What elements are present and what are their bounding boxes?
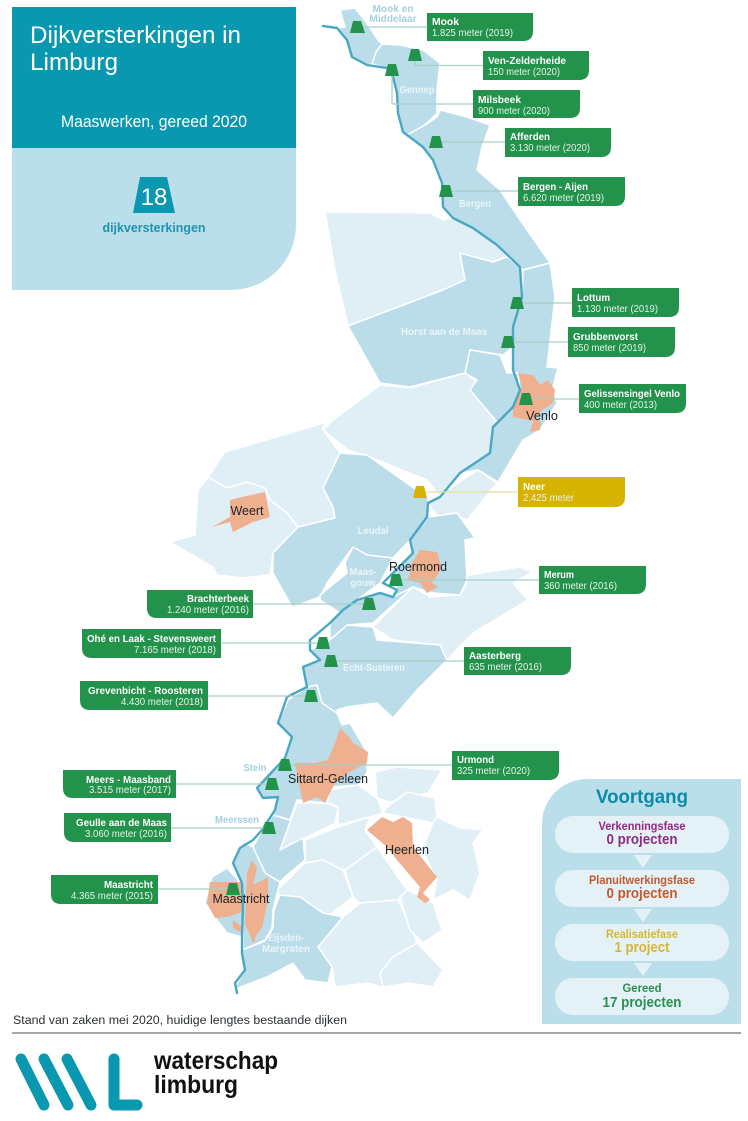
region names: Margraten: [262, 943, 310, 955]
city names: Heerlen: [385, 842, 429, 857]
city: Weert: [212, 492, 270, 532]
title: Dijkversterkingen in: [30, 22, 241, 49]
marker: Neer: [413, 486, 427, 498]
label: Milsbeek: [473, 90, 580, 118]
stage: Gereed: Gereed: [622, 981, 662, 995]
label: Geulle aan de Maas: [64, 813, 171, 842]
label: Ven-Zelderheide: 150 meter (2020): [488, 67, 560, 78]
marker: Grubbenvorst: [501, 336, 515, 348]
icon: dike count trapezoid: [133, 177, 175, 213]
label: Grubbenvorst: Grubbenvorst: [573, 331, 638, 343]
stage: Verkenningsfase: 0 projecten: [606, 832, 678, 848]
region names: Bergen: [459, 198, 491, 210]
label: Meers - Maasband: 3.515 meter (2017): [89, 785, 171, 796]
region names: Mook en: [372, 3, 414, 15]
city: Heerlen: [367, 817, 437, 903]
stage: Planuitwerkingsfase: [555, 870, 729, 907]
label: Milsbeek: Milsbeek: [478, 94, 521, 106]
project labels: [51, 13, 686, 904]
region names: Stein: [244, 762, 266, 774]
marker: Milsbeek: [385, 64, 399, 76]
label: Lottum: Lottum: [577, 292, 610, 304]
label: Bergen - Aijen: [518, 177, 625, 206]
icon: logo mark: [21, 1059, 137, 1105]
marker: Ohé en Laak - Stevensweert: [316, 637, 330, 649]
arrow: [634, 909, 652, 922]
label: Brachterbeek: 1.240 meter (2016): [167, 605, 249, 616]
city: Maastricht south: [233, 920, 242, 933]
marker: Urmond: [278, 759, 292, 771]
light regions: [170, 212, 532, 987]
label: Gelissensingel Venlo: Gelissensingel Venlo: [584, 388, 680, 400]
city names: Sittard-Geleen: [288, 771, 368, 786]
label: Meers - Maasband: [63, 770, 176, 798]
city names: [212, 408, 558, 906]
city: Sittard-Geleen: [295, 728, 368, 803]
marker: Maastricht: [226, 883, 240, 895]
label: Maastricht: [51, 875, 158, 904]
river Maas: [233, 26, 522, 993]
region names: Middelaar: [370, 13, 416, 25]
subtitle: Maaswerken, gereed 2020: [61, 113, 247, 131]
label: Afferden: Afferden: [510, 131, 550, 143]
city: Roermond: [408, 550, 442, 593]
label: Grevenbicht - Roosteren: Grevenbicht - Roosteren: [88, 685, 203, 697]
label: Geulle aan de Maas: 3.060 meter (2016): [85, 829, 167, 840]
marker: Meers - Maasband: [265, 778, 279, 790]
marker: Brachterbeek: [362, 598, 376, 610]
region names: Horst aan de Maas: [401, 326, 487, 338]
city names: Maastricht: [212, 891, 270, 906]
progress heading: Voortgang: [596, 787, 688, 808]
label: Geulle aan de Maas: Geulle aan de Maas: [76, 817, 167, 829]
city names: Venlo: [526, 408, 558, 423]
label: Urmond: 325 meter (2020): [457, 766, 530, 777]
leader lines: [158, 27, 579, 889]
count panel background: [12, 148, 296, 290]
stage: Gereed: 17 projecten: [602, 995, 682, 1011]
label: Aasterberg: [464, 647, 571, 675]
label: Neer: Neer: [523, 481, 545, 493]
label: Lottum: [572, 288, 679, 317]
label: Grubbenvorst: [568, 327, 675, 357]
label: Grevenbicht - Roosteren: 4.430 meter (2018): [121, 697, 203, 708]
progress panel background: [542, 779, 741, 1024]
label: Mook: Mook: [432, 16, 459, 28]
marker: Ven-Zelderheide: [408, 49, 422, 61]
city names: Roermond: [389, 559, 447, 574]
city: Maastricht west: [207, 882, 243, 918]
city: Venlo: [513, 373, 555, 432]
label: Aasterberg: 635 meter (2016): [469, 662, 542, 673]
stage: Verkenningsfase: [555, 816, 729, 853]
label: Maastricht: 4.365 meter (2015): [71, 891, 153, 902]
logo text: waterschap: [153, 1047, 278, 1075]
marker: Lottum: [510, 297, 524, 309]
map: municipalities of Limburg: [170, 3, 558, 993]
label: Grevenbicht - Roosteren: [80, 681, 208, 710]
stage: Gereed: [555, 978, 729, 1015]
stage: Planuitwerkingsfase: Planuitwerkingsfase: [589, 873, 695, 887]
title second line: Limburg: [30, 49, 118, 76]
region names: gouw: [350, 577, 376, 589]
region names: Maas-: [350, 566, 377, 578]
city: Maastricht east: [245, 860, 268, 942]
label: Ohé en Laak - Stevensweert: 7.165 meter (2018): [134, 645, 216, 656]
label: Mook: [427, 13, 533, 41]
arrow: [634, 963, 652, 976]
label: Brachterbeek: [147, 590, 253, 618]
label: Aasterberg: Aasterberg: [469, 650, 521, 662]
city names: Weert: [230, 503, 264, 518]
marker: Bergen - Aijen: [439, 185, 453, 197]
marker: Mook: [350, 21, 365, 33]
label: Ven-Zelderheide: [483, 51, 589, 80]
region names: Eijsden-: [268, 932, 304, 944]
region names: Echt-Susteren: [343, 662, 405, 674]
label: Gelissensingel Venlo: [579, 384, 686, 413]
mid-blue regions along the Maas: [205, 8, 558, 990]
label: Ohé en Laak - Stevensweert: Ohé en Laak - Stevensweert: [87, 633, 216, 645]
count number: 18: [141, 184, 167, 211]
label: Merum: [539, 566, 646, 594]
stage: Realisatiefase: Realisatiefase: [606, 927, 678, 941]
label: Meers - Maasband: Meers - Maasband: [86, 774, 171, 786]
panel: Voortgang progress: [542, 779, 741, 1024]
region names: Meerssen: [215, 814, 259, 826]
marker: Merum: [389, 574, 403, 586]
label: Bergen - Aijen: Bergen - Aijen: [523, 181, 588, 193]
stage: Realisatiefase: [555, 924, 729, 961]
label: Lottum: 1.130 meter (2019): [577, 304, 658, 315]
label: Merum: 360 meter (2016): [544, 581, 617, 592]
label: Urmond: [452, 751, 559, 780]
label: Mook: 1.825 meter (2019): [432, 28, 513, 39]
label: Grubbenvorst: 850 meter (2019): [573, 343, 646, 354]
footnote: Stand van zaken mei 2020, huidige lengtes bestaande dijken: [13, 1015, 347, 1027]
marker: Aasterberg: [324, 655, 338, 667]
label: Neer: 2.425 meter: [523, 493, 575, 504]
stage: Planuitwerkingsfase: 0 projecten: [606, 886, 678, 902]
label: Merum: Merum: [544, 569, 574, 581]
marker: Grevenbicht - Roosteren: [304, 690, 318, 702]
label: Urmond: Urmond: [457, 754, 494, 766]
label: Neer: [518, 477, 625, 507]
label: Afferden: 3.130 meter (2020): [510, 143, 590, 154]
dike markers: [226, 21, 533, 895]
logo: waterschap limburg: limburg: [154, 1071, 238, 1099]
region names: [215, 3, 491, 955]
label: Bergen - Aijen: 6.620 meter (2019): [523, 193, 604, 204]
label: Gelissensingel Venlo: 400 meter (2013): [584, 400, 657, 411]
logo: waterschap limburg: [21, 1047, 278, 1105]
stage: Verkenningsfase: Verkenningsfase: [598, 819, 686, 833]
arrow: [634, 855, 652, 868]
marker: Afferden: [429, 136, 443, 148]
region names: Gennep: [400, 84, 434, 96]
panel: title and total count: [12, 7, 296, 290]
city areas: [207, 373, 555, 942]
title panel background: [12, 7, 296, 148]
stage: Realisatiefase: 1 project: [614, 940, 670, 956]
marker: Gelissensingel Venlo: [519, 393, 533, 405]
label: Ven-Zelderheide: Ven-Zelderheide: [488, 55, 566, 67]
label: Milsbeek: 900 meter (2020): [478, 106, 550, 117]
label: Ohé en Laak - Stevensweert: [82, 629, 221, 658]
label: Afferden: [505, 128, 611, 157]
count label: dijkversterkingen: [102, 220, 206, 235]
label: Brachterbeek: Brachterbeek: [187, 593, 249, 605]
marker: Geulle aan de Maas: [262, 822, 276, 834]
label: Maastricht: Maastricht: [104, 879, 153, 891]
region names: Leudal: [358, 525, 389, 537]
